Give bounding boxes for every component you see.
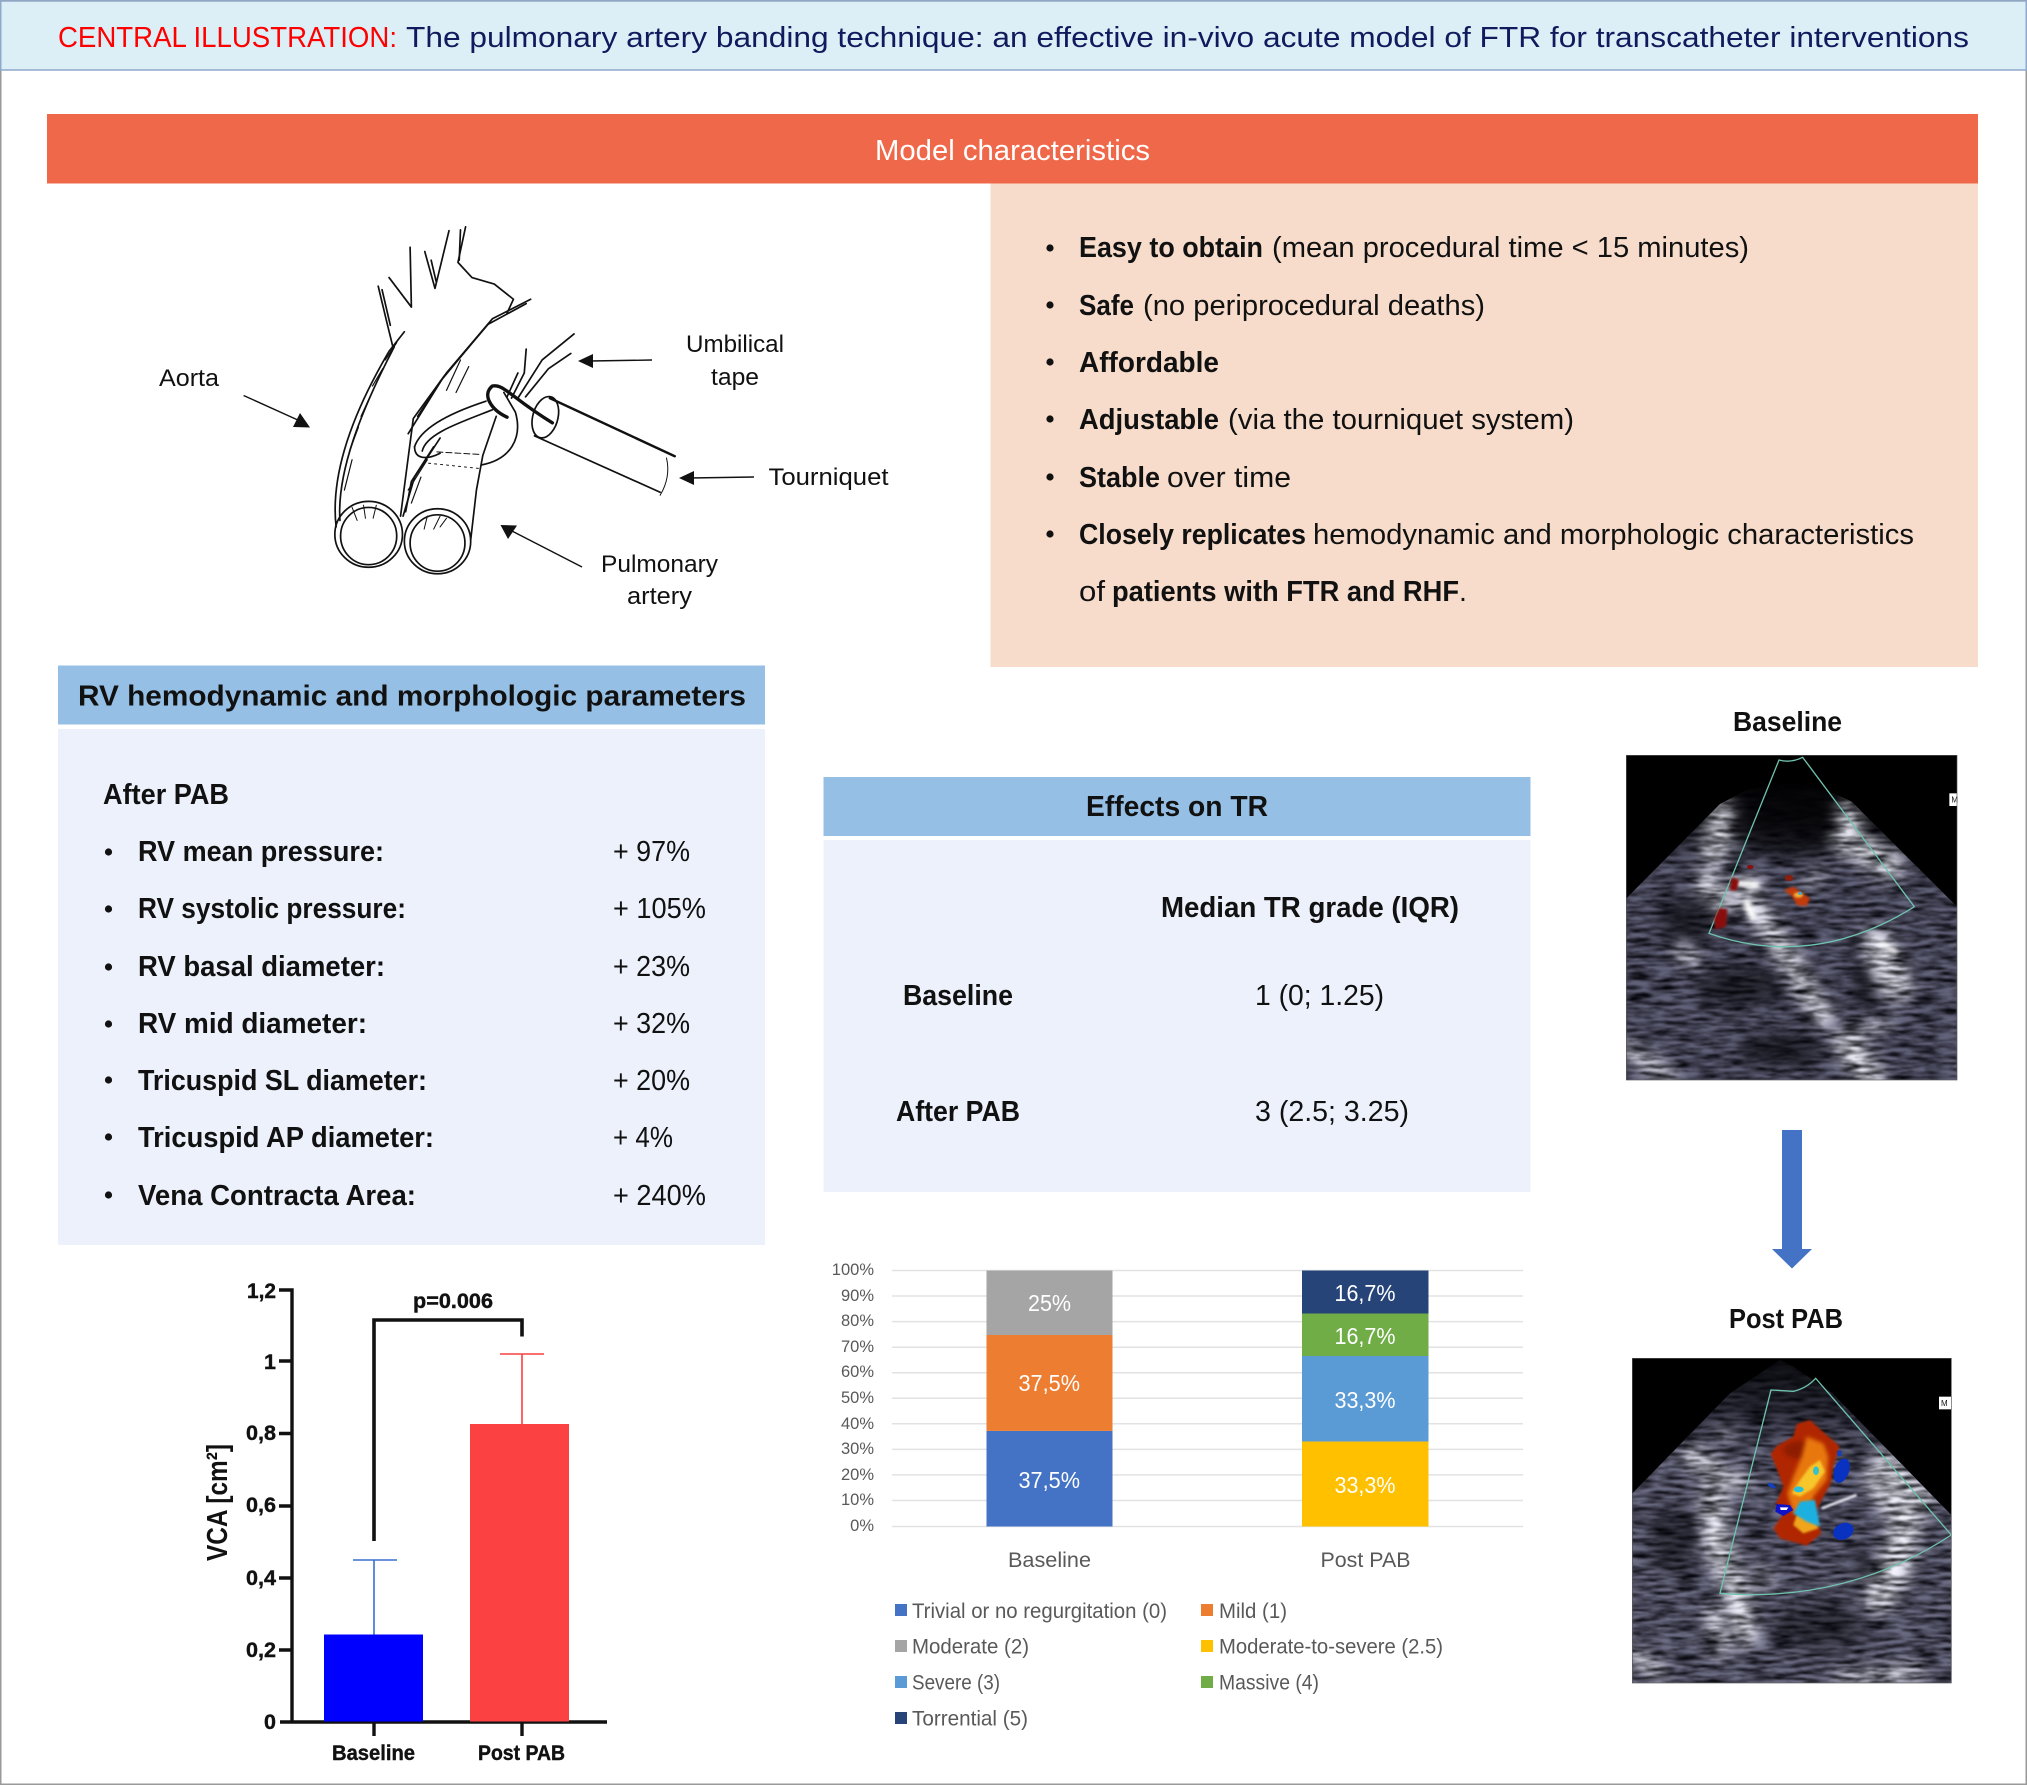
row: RV systolic pressure: + 105%	[613, 893, 706, 925]
tick labels: 10%	[841, 1491, 874, 1509]
y axis labels	[246, 1279, 276, 1734]
echo image: post PAB	[1632, 1358, 1951, 1683]
row: RV mean pressure	[138, 836, 690, 868]
y axis labels: 1,2	[247, 1279, 276, 1303]
heading: RV parameters	[58, 666, 765, 724]
row: tricuspid AP diameter: Tricuspid AP diameter:	[138, 1122, 434, 1154]
row: RV mid diameter: RV mid diameter:	[138, 1008, 367, 1040]
row: RV basal diameter: + 23%	[613, 951, 690, 983]
row: tricuspid SL diameter: Tricuspid SL diameter:	[138, 1065, 427, 1097]
row: RV mid diameter	[138, 1008, 690, 1040]
item: stable: over time	[1167, 462, 1291, 494]
tick labels: 30%	[841, 1440, 874, 1458]
bar: baseline	[324, 1560, 423, 1722]
tick labels: 0%	[850, 1517, 874, 1535]
label: Tourniquet: Tourniquet	[768, 464, 889, 491]
legend: Mild (1)	[1219, 1600, 1287, 1623]
label: Pulmonary: Pulmonary	[601, 551, 718, 578]
stacked bar: baseline: 37,5%	[1018, 1370, 1080, 1396]
x labels	[332, 1741, 565, 1765]
arrow: pulmonary artery	[500, 525, 582, 567]
legend: Moderate-to-severe (2.5)	[1219, 1636, 1443, 1658]
panel: RV parameters	[58, 729, 765, 1245]
subheading: After PAB: After PAB	[103, 779, 229, 811]
significance bracket	[374, 1289, 522, 1541]
y axis labels: 0,8	[246, 1421, 276, 1445]
banner heading: Model characteristics	[875, 135, 1150, 167]
stacked bar chart: TR grade	[832, 1261, 1523, 1730]
item: closely replicates	[1079, 519, 1914, 608]
row: RV basal diameter	[138, 951, 690, 983]
stacked bar: baseline	[986, 1270, 1112, 1526]
bar chart: VCA	[202, 1279, 607, 1765]
row: RV mean pressure: RV mean pressure:	[138, 836, 384, 868]
echo image: baseline	[1626, 755, 1958, 1080]
heading: RV parameters: RV hemodynamic and morphologic parameters	[78, 680, 746, 712]
item: easy to obtain	[1079, 232, 1749, 264]
item: closely replicates: patients with FTR and RHF	[1112, 576, 1459, 608]
category labels	[1008, 1549, 1410, 1572]
colour doppler: small jets	[1714, 865, 1810, 929]
legend: Massive (4)	[1219, 1672, 1319, 1694]
tick labels: 100%	[832, 1261, 874, 1279]
stacked bar: post PAB: 33,3%	[1334, 1472, 1396, 1498]
tick labels: 40%	[841, 1415, 874, 1433]
item: easy to obtain: Easy to obtain	[1079, 232, 1263, 264]
category labels: Baseline	[1008, 1549, 1091, 1572]
arrow: umbilical tape	[578, 354, 652, 368]
legend: Severe (3)	[912, 1672, 1000, 1694]
y axis labels: 1	[264, 1350, 276, 1374]
legend: Trivial or no regurgitation (0)	[912, 1600, 1167, 1623]
row: baseline: 1 (0; 1.25)	[1255, 980, 1384, 1012]
item: safe: (no periprocedural deaths)	[1143, 290, 1485, 322]
anatomical sketch with labels	[159, 227, 889, 610]
row: tricuspid SL diameter	[138, 1065, 690, 1097]
item: adjustable: Adjustable	[1079, 404, 1219, 436]
row: RV systolic pressure	[138, 893, 706, 925]
panel: effects on TR table	[824, 840, 1530, 1192]
heading: echo baseline: Baseline	[1733, 706, 1842, 737]
item: stable: Stable	[1079, 462, 1160, 494]
panel: model characteristics list	[990, 184, 1978, 667]
row: vena contracta area	[138, 1180, 706, 1212]
echo sector outline	[1720, 1378, 1951, 1595]
title: red prefix: CENTRAL ILLUSTRATION:	[58, 22, 397, 54]
bullets	[1046, 244, 1054, 538]
bullets	[105, 848, 112, 1199]
row: after PAB	[896, 1096, 1409, 1128]
bar: post PAB	[470, 1354, 569, 1722]
label: tape: tape	[711, 364, 759, 391]
arrow: baseline to post PAB	[1772, 1130, 1812, 1268]
probe marker	[1939, 1397, 1951, 1409]
stacked bar: post PAB: 16,7%	[1334, 1323, 1396, 1349]
stacked bar: post PAB: 16,7%	[1334, 1280, 1396, 1306]
item: adjustable: (via the tourniquet system)	[1228, 404, 1574, 436]
tick labels: 60%	[841, 1363, 874, 1381]
label: Aorta: Aorta	[159, 365, 220, 392]
item: stable	[1079, 462, 1291, 494]
stacked bar: baseline: 37,5%	[1018, 1467, 1080, 1493]
x labels: Baseline	[332, 1741, 415, 1765]
stacked bar: post PAB: 33,3%	[1334, 1387, 1396, 1413]
item: closely replicates: hemodynamic and morphologic characteristics	[1313, 519, 1914, 551]
arrow: aorta	[244, 396, 310, 428]
label: Umbilical: Umbilical	[686, 331, 784, 358]
item: closely replicates: .	[1459, 576, 1467, 608]
item: easy to obtain: (mean procedural time < 15 minutes)	[1272, 232, 1749, 264]
arrow: tourniquet	[679, 471, 754, 485]
tick labels	[832, 1261, 874, 1535]
legend: Torrential (5)	[912, 1708, 1028, 1730]
item: adjustable	[1079, 404, 1574, 436]
legend: Moderate (2)	[912, 1636, 1029, 1658]
sketch: aorta and pulmonary artery with tourniquet	[335, 227, 675, 574]
tick labels: 90%	[841, 1287, 874, 1305]
probe marker: M	[1951, 796, 1958, 805]
item: closely replicates: of	[1079, 576, 1105, 608]
legend	[895, 1600, 1443, 1730]
y axis labels: 0,6	[246, 1493, 276, 1517]
row: RV mean pressure: + 97%	[613, 836, 690, 868]
heading: echo post PAB: Post PAB	[1729, 1303, 1843, 1334]
row: RV basal diameter: RV basal diameter:	[138, 951, 385, 983]
y axis labels: 0	[264, 1710, 276, 1734]
row: RV systolic pressure: RV systolic pressure:	[138, 893, 406, 925]
row: RV mid diameter: + 32%	[613, 1008, 690, 1040]
y axis labels: 0,2	[246, 1638, 276, 1662]
tick labels: 20%	[841, 1466, 874, 1484]
label: artery: artery	[627, 583, 692, 610]
row: after PAB: 3 (2.5; 3.25)	[1255, 1096, 1409, 1128]
heading: effects on TR	[824, 777, 1530, 836]
echo sector outline	[1709, 757, 1914, 947]
row: after PAB: After PAB	[896, 1096, 1020, 1128]
heading: effects on TR: Effects on TR	[1086, 791, 1268, 823]
stacked bar: post PAB	[1302, 1270, 1428, 1526]
table header: Median TR grade (IQR)	[1161, 892, 1459, 924]
category labels: Post PAB	[1320, 1549, 1410, 1572]
y axis	[279, 1290, 607, 1736]
row: tricuspid AP diameter	[138, 1122, 673, 1154]
row: baseline	[903, 980, 1384, 1012]
item: closely replicates: Closely replicates	[1079, 519, 1306, 551]
row: tricuspid SL diameter: + 20%	[613, 1065, 690, 1097]
y axis labels: 0,4	[246, 1566, 276, 1590]
colour doppler: regurgitant jet	[1767, 1420, 1856, 1546]
item: safe: Safe	[1079, 290, 1134, 322]
tick labels: 70%	[841, 1338, 874, 1356]
title: main text: The pulmonary artery banding technique: an effective in-vivo acute model of FTR for transcatheter interventions	[406, 22, 1969, 54]
tick labels: 50%	[841, 1389, 874, 1407]
row: vena contracta area: + 240%	[613, 1180, 706, 1212]
item: affordable: Affordable	[1079, 347, 1219, 379]
x labels: Post PAB	[478, 1741, 565, 1765]
probe marker: M	[1941, 1399, 1948, 1408]
y axis title: VCA [cm²]	[202, 1444, 234, 1561]
row: vena contracta area: Vena Contracta Area:	[138, 1180, 416, 1212]
significance bracket: p=0.006	[413, 1289, 493, 1313]
row: baseline: Baseline	[903, 980, 1013, 1012]
banner: model characteristics	[47, 114, 1978, 184]
tick labels: 80%	[841, 1312, 874, 1330]
stacked bar: baseline: 25%	[1028, 1290, 1071, 1316]
title bar	[1, 1, 2026, 70]
probe marker	[1949, 793, 1958, 806]
row: tricuspid AP diameter: + 4%	[613, 1122, 673, 1154]
gridlines	[892, 1270, 1523, 1526]
